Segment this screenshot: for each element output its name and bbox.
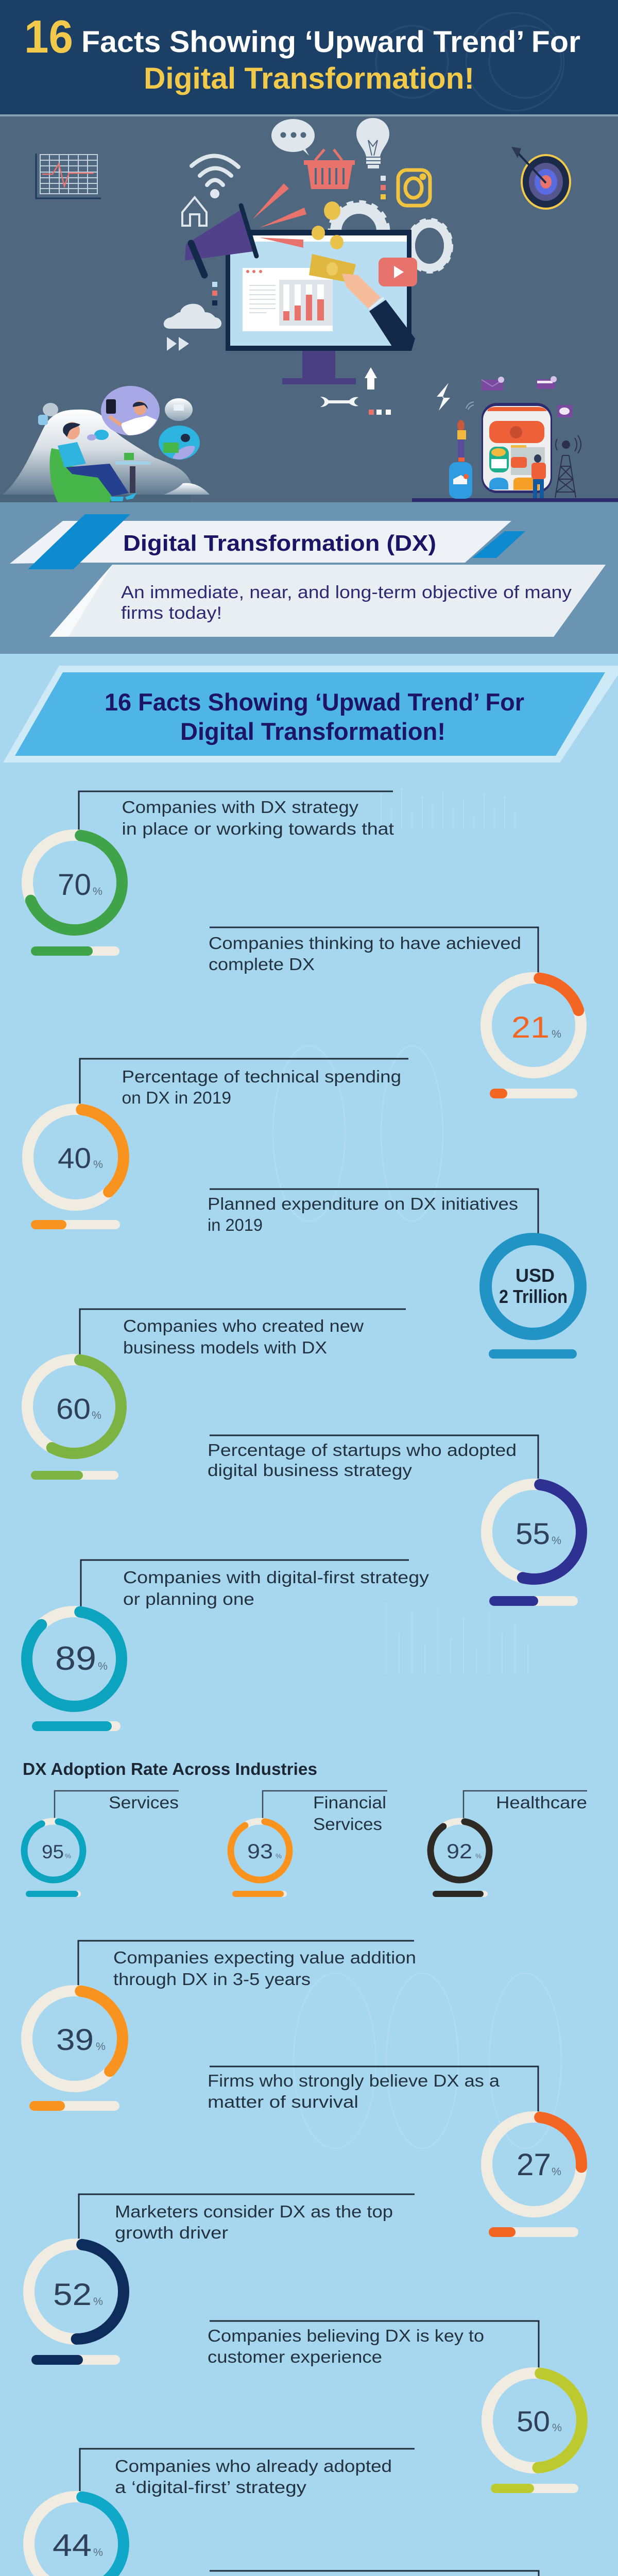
ring: 50%: 50 bbox=[517, 2405, 550, 2437]
ring: 70%: 70 bbox=[58, 868, 91, 902]
ring: 55%: 55 bbox=[516, 1517, 550, 1551]
description: customer experience bbox=[208, 2347, 382, 2366]
man bbox=[58, 422, 137, 501]
main title: 16 bbox=[24, 11, 73, 63]
ring: 60% bbox=[22, 1354, 126, 1459]
bar: 89% bbox=[32, 1721, 121, 1731]
monitor report card bbox=[243, 268, 333, 331]
banner: DX description: firms today! bbox=[121, 603, 222, 623]
ring: 39% bbox=[21, 1985, 128, 2092]
coins bbox=[312, 201, 344, 249]
connector bbox=[55, 1791, 179, 1818]
banner: Digital Transformation (DX): Digital Transformation (DX) bbox=[123, 531, 436, 556]
woman on device bbox=[449, 420, 472, 499]
description: in 2019 bbox=[208, 1215, 263, 1234]
bar: 50% bbox=[491, 2484, 578, 2493]
description: matter of survival bbox=[208, 2092, 358, 2111]
icon: house bbox=[182, 197, 207, 226]
ring: 89%: 89 bbox=[55, 1639, 96, 1677]
label: Services bbox=[313, 1815, 382, 1834]
fact 6: 55% bbox=[208, 1435, 587, 1606]
ring: 52%: 52 bbox=[53, 2277, 92, 2312]
ring: 27% bbox=[481, 2111, 587, 2217]
description: complete DX bbox=[209, 955, 315, 974]
fact 1: 70% bbox=[22, 791, 394, 956]
description: in place or working towards that bbox=[122, 819, 394, 838]
description: through DX in 3-5 years bbox=[113, 1970, 311, 1989]
intro band bbox=[0, 502, 618, 654]
fact 3: 40% bbox=[22, 1059, 408, 1229]
ring: 93%: % bbox=[276, 1852, 282, 1860]
ring: 39%: % bbox=[96, 2041, 106, 2053]
ring: 44% bbox=[23, 2491, 129, 2576]
description: digital business strategy bbox=[208, 1461, 413, 1480]
section heading banner: 16 Facts Showing ‘Upwad Trend’ For bbox=[105, 688, 524, 716]
description bbox=[115, 2202, 393, 2242]
ring: 93%: 93 bbox=[247, 1840, 273, 1863]
label bbox=[313, 1793, 386, 1834]
connector bbox=[464, 1791, 587, 1818]
icon: wifi bbox=[192, 156, 238, 196]
ring: 92% bbox=[426, 1817, 493, 1884]
hand holding money bbox=[309, 254, 415, 351]
signal tower bbox=[555, 435, 581, 498]
connector bbox=[80, 1309, 406, 1354]
banner: DX description: An immediate, near, and long-term objective of many bbox=[121, 583, 572, 602]
ring: 52%: % bbox=[93, 2296, 103, 2308]
ring: 70%: % bbox=[93, 886, 102, 897]
icon: video play bbox=[379, 258, 417, 286]
ring: USD 2 Trillion: USD bbox=[516, 1265, 555, 1286]
fact 12: 44% bbox=[23, 2449, 415, 2576]
description: Companies with DX strategy bbox=[122, 798, 359, 817]
icon: wrench bbox=[320, 397, 358, 407]
ring: USD 2 Trillion bbox=[486, 1239, 580, 1334]
label: Services bbox=[109, 1793, 179, 1812]
connector bbox=[78, 1941, 414, 1987]
description: Marketers consider DX as the top bbox=[115, 2202, 393, 2221]
description: Percentage of startups who adopted bbox=[208, 1440, 517, 1460]
icon: target with arrow bbox=[511, 147, 570, 209]
icon: folder bbox=[537, 376, 557, 389]
fact 4: USD 2 Trillion bbox=[208, 1189, 580, 1359]
bar: 55% bbox=[489, 1596, 578, 1606]
ring: 39%: 39 bbox=[56, 2023, 94, 2057]
monitor bbox=[226, 230, 411, 384]
label: Healthcare bbox=[496, 1793, 587, 1812]
ring: 93% bbox=[227, 1817, 294, 1884]
icon: heart-rate chart bbox=[36, 154, 101, 198]
description: Companies expecting value addition bbox=[113, 1948, 416, 1967]
scene: person in armchair bbox=[0, 403, 210, 502]
ring: 40%: 40 bbox=[58, 1142, 91, 1174]
fact 9: 27% bbox=[208, 2066, 587, 2237]
description: on DX in 2019 bbox=[122, 1088, 231, 1107]
description: Companies believing DX is key to bbox=[208, 2326, 484, 2345]
ring: 21% bbox=[480, 972, 587, 1078]
main title bbox=[24, 11, 580, 95]
industry: healthcare 92% bbox=[426, 1791, 587, 1897]
industry: services 95% bbox=[20, 1791, 179, 1897]
bar: 40% bbox=[31, 1220, 120, 1229]
icon: envelope bbox=[482, 377, 504, 391]
ring: 89% bbox=[21, 1606, 127, 1712]
section heading banner bbox=[3, 666, 618, 762]
bar: 60% bbox=[31, 1471, 118, 1480]
ring: 95%: % bbox=[65, 1852, 71, 1860]
description bbox=[208, 1194, 518, 1234]
icon: instagram bbox=[398, 170, 430, 206]
ring: 21%: % bbox=[552, 1028, 561, 1040]
section heading banner: Digital Transformation! bbox=[180, 718, 445, 745]
banner: Digital Transformation (DX) bbox=[10, 514, 525, 569]
description: Firms who strongly believe DX as a bbox=[208, 2071, 500, 2090]
description: business models with DX bbox=[123, 1338, 327, 1357]
connector bbox=[263, 1791, 387, 1818]
description bbox=[122, 798, 394, 838]
bar: 52% bbox=[31, 2355, 120, 2365]
icon: shopping basket bbox=[304, 149, 355, 189]
description bbox=[208, 1440, 517, 1480]
small squares right bbox=[381, 176, 386, 199]
icon: lightning bbox=[437, 383, 450, 411]
megaphone bbox=[185, 183, 306, 275]
fact 13: 35% bbox=[208, 2571, 587, 2576]
fact 2: 21% bbox=[209, 927, 587, 1098]
bar: 95% bbox=[26, 1891, 81, 1897]
ring: 55% bbox=[481, 1479, 587, 1585]
bubble: selfie bbox=[101, 386, 160, 435]
fact 8: 39% bbox=[21, 1941, 416, 2111]
connector bbox=[210, 1189, 538, 1235]
table with cup bbox=[115, 453, 151, 493]
ring: 27%: % bbox=[552, 2166, 561, 2178]
description: Companies thinking to have achieved bbox=[209, 934, 521, 953]
description: growth driver bbox=[115, 2223, 228, 2242]
description: Companies with digital-first strategy bbox=[123, 1568, 430, 1587]
fact 5: 60% bbox=[22, 1309, 406, 1480]
ring: 70% bbox=[22, 829, 128, 936]
ring: 50% bbox=[482, 2367, 588, 2473]
icon: chat bubble bbox=[271, 119, 315, 156]
bubble: mail bbox=[165, 398, 193, 421]
ring: 92%: % bbox=[475, 1852, 482, 1860]
gears bbox=[330, 202, 451, 272]
description bbox=[208, 2071, 500, 2111]
description bbox=[115, 2456, 392, 2497]
main title: Facts Showing ‘Upward Trend’ For bbox=[81, 25, 580, 59]
ring: 27%: 27 bbox=[517, 2147, 551, 2182]
small squares left bbox=[212, 282, 217, 306]
connector bbox=[210, 1435, 538, 1479]
bar: 21% bbox=[490, 1089, 577, 1098]
ring: 44%: % bbox=[93, 2547, 103, 2558]
small squares wrench bbox=[369, 410, 391, 415]
description bbox=[113, 1948, 416, 1989]
icon: signal waves bbox=[466, 402, 474, 410]
man at app bbox=[531, 454, 546, 498]
icon: fast forward bbox=[167, 337, 189, 351]
bar: full bbox=[489, 1349, 577, 1359]
main title: Digital Transformation! bbox=[144, 62, 474, 95]
icon: light bulb bbox=[356, 118, 389, 168]
armchair bbox=[49, 448, 117, 502]
connector bbox=[80, 2449, 415, 2493]
banner: DX description bbox=[49, 565, 606, 637]
connector bbox=[210, 2571, 539, 2576]
bar: 92% bbox=[433, 1891, 488, 1897]
description bbox=[209, 934, 521, 974]
ring: 95% bbox=[20, 1817, 87, 1884]
bar: 93% bbox=[232, 1891, 287, 1897]
bar: 70% bbox=[31, 946, 119, 956]
icon: up arrow bbox=[365, 367, 377, 389]
scene: mobile app with people bbox=[412, 376, 618, 502]
ring: 40% bbox=[22, 1104, 129, 1211]
connector bbox=[79, 2194, 415, 2240]
connector bbox=[210, 927, 538, 973]
industry: financial services 93% bbox=[227, 1791, 387, 1897]
connector bbox=[210, 2066, 538, 2112]
ring: 21%: 21 bbox=[511, 1011, 550, 1044]
bar: 27% bbox=[489, 2227, 578, 2237]
ring: 60%: % bbox=[92, 1410, 101, 1421]
description: Companies who created new bbox=[123, 1316, 364, 1335]
ring: 95%: 95 bbox=[42, 1841, 64, 1862]
description bbox=[122, 1067, 401, 1107]
description bbox=[208, 2326, 484, 2366]
ring: 60%: 60 bbox=[56, 1393, 91, 1426]
app screen bbox=[482, 403, 552, 493]
bubble: woman at screen bbox=[159, 426, 200, 460]
ring: 92%: 92 bbox=[447, 1840, 472, 1863]
description: Companies who already adopted bbox=[115, 2456, 392, 2476]
ring: 44%: 44 bbox=[53, 2528, 92, 2563]
icon: eye badge bbox=[557, 405, 573, 417]
connector bbox=[79, 791, 393, 831]
icon: cloud bbox=[164, 304, 221, 329]
ring: USD 2 Trillion: 2 Trillion bbox=[499, 1286, 568, 1307]
connector bbox=[81, 1560, 409, 1607]
connector bbox=[210, 2321, 539, 2368]
heading: adoption rate across industries: DX Adoption Rate Across Industries bbox=[23, 1759, 317, 1778]
description: Percentage of technical spending bbox=[122, 1067, 401, 1086]
ring: 40%: % bbox=[93, 1159, 103, 1171]
ring: 52% bbox=[23, 2239, 129, 2345]
description: or planning one bbox=[123, 1589, 254, 1608]
bar: 39% bbox=[29, 2101, 119, 2111]
ring: 89%: % bbox=[98, 1660, 108, 1672]
fact 10: 52% bbox=[23, 2194, 415, 2365]
description: Planned expenditure on DX initiatives bbox=[208, 1194, 518, 1213]
description bbox=[123, 1316, 364, 1357]
ring: 55%: % bbox=[552, 1535, 561, 1547]
fact 11: 50% bbox=[208, 2321, 588, 2493]
header band bbox=[0, 0, 618, 116]
description bbox=[123, 1568, 430, 1608]
label: Financial bbox=[313, 1793, 386, 1812]
ring: 50%: % bbox=[552, 2422, 562, 2434]
description: a ‘digital-first’ strategy bbox=[115, 2478, 307, 2497]
connector bbox=[80, 1059, 408, 1105]
fact 7: 89% bbox=[21, 1560, 430, 1731]
